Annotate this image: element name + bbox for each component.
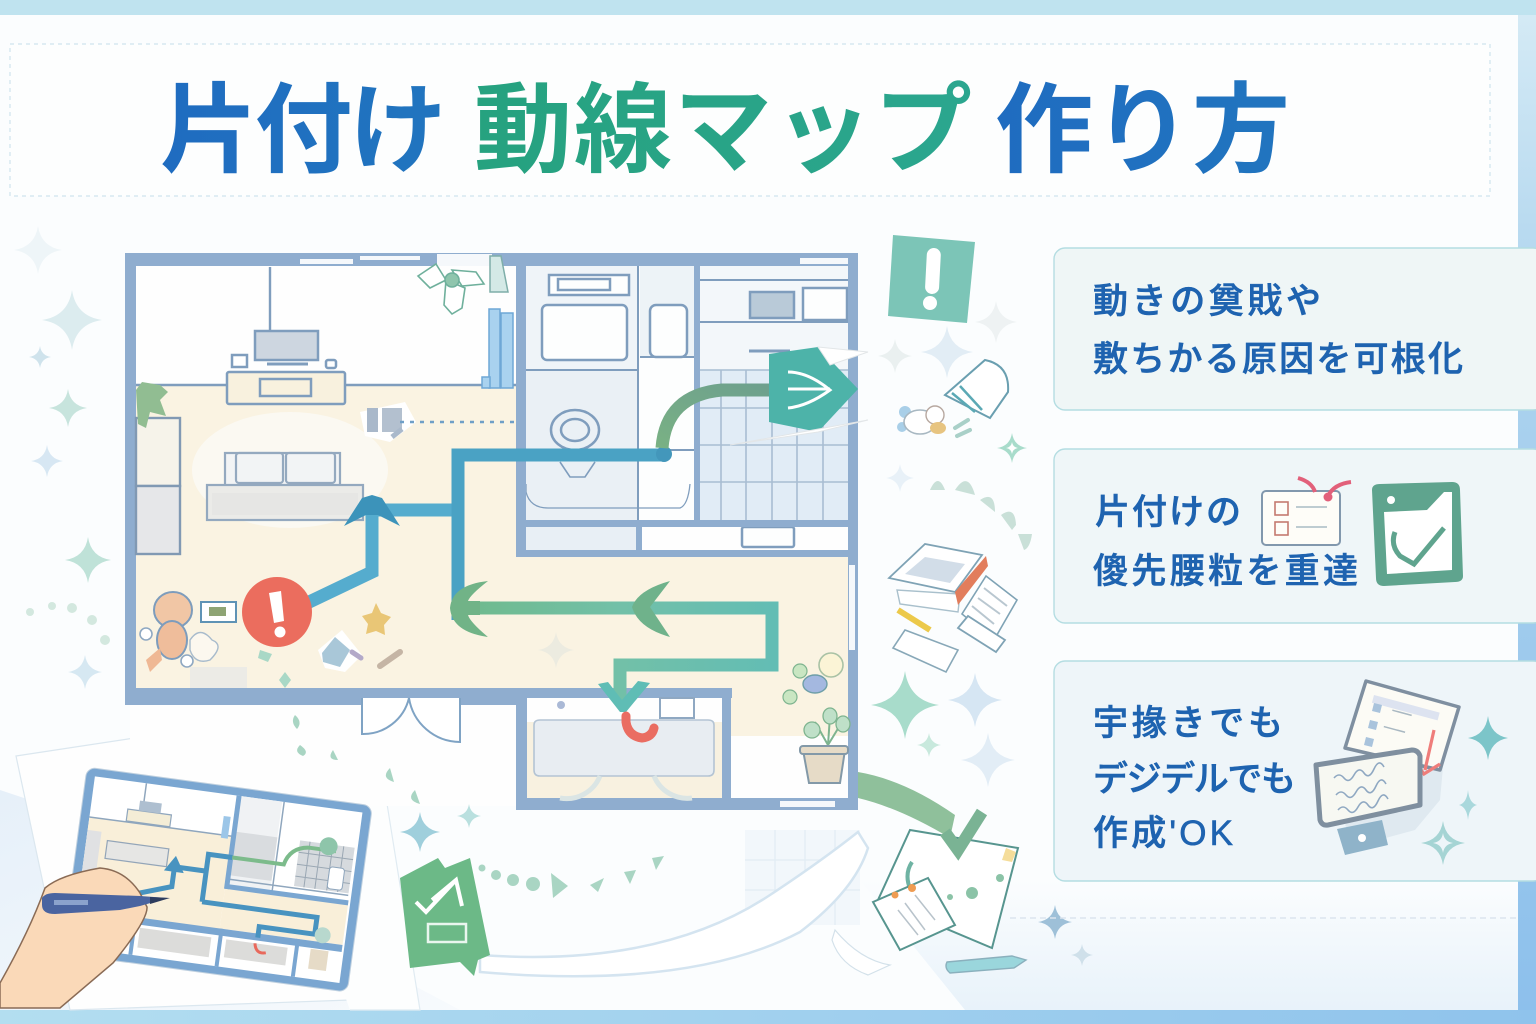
large white curved arrow [480, 832, 868, 976]
plan: toys on floor [258, 603, 400, 688]
route: teal arrowhead down [598, 681, 650, 712]
title: 動線マップ [474, 75, 972, 185]
title: 作り方 [995, 75, 1290, 185]
route: green arrowhead right [632, 581, 670, 637]
plan: baby with toys [140, 592, 247, 688]
hand holding pen [0, 868, 170, 1008]
background: lower right tint [860, 880, 1518, 1010]
plan: bathroom rooms [526, 265, 848, 551]
plan: clutter box near dotted line [360, 402, 520, 442]
title [160, 75, 1290, 185]
plan: left plant [136, 382, 168, 428]
card 2 text [1093, 493, 1358, 591]
route: red hook [626, 716, 654, 738]
card 3 text: 宇掾きでも [1093, 704, 1283, 743]
title box [10, 44, 1490, 196]
boxes and papers [889, 544, 1017, 672]
dotted trail: left [26, 602, 110, 876]
scattered clutter [897, 360, 1008, 436]
icon: monitor with checklist [1316, 750, 1420, 855]
icon: green clipboard check [1372, 482, 1463, 586]
route: green curve [662, 390, 790, 448]
card 1 text: 敷ちかる原因を可根化 [1093, 340, 1463, 379]
plan: TV stand [136, 267, 516, 404]
plan: corridor wooden floor [516, 555, 848, 690]
plan: living wooden floor [136, 386, 518, 690]
plan: interior base [130, 258, 854, 806]
plan: outer walls [125, 253, 858, 810]
top colour strip [0, 0, 1536, 15]
floor plan [125, 253, 868, 810]
icon: checklist tag [1262, 478, 1351, 545]
alert tile [888, 235, 975, 323]
route: blue path [305, 455, 662, 620]
card 3 sparkles [1421, 716, 1508, 865]
plan: sofa [207, 453, 363, 520]
plan: potted plant [800, 708, 850, 783]
plan: faint floor sparkle [538, 632, 574, 668]
title: 片付け [160, 75, 447, 185]
green curved arrow to notebook [858, 772, 955, 838]
card 1 text [1093, 282, 1463, 379]
plan: bath and toilet [526, 265, 848, 547]
tablet with route map [62, 767, 372, 992]
green checklist badge [400, 858, 490, 976]
plan: books [482, 309, 513, 388]
dotted arc [930, 481, 1032, 550]
plan: interior walls [516, 262, 856, 810]
plan: red alert circle [242, 577, 312, 647]
sparkles: middle right [871, 671, 1093, 966]
icon: tablet checklist [1345, 681, 1459, 845]
plan: left shelves [136, 418, 180, 554]
pen and scrap [832, 930, 1026, 975]
card 3 text [1093, 704, 1296, 853]
plan: right plant and flower [783, 653, 843, 704]
card 1 text: 動きの奠戝や [1093, 282, 1321, 321]
bottom colour strip [0, 1010, 1536, 1024]
plan: rug [192, 412, 388, 528]
notebook with route [873, 830, 1018, 950]
card 1 [1054, 248, 1536, 410]
plan: bottom room floor [526, 722, 722, 798]
dashed separator lower right [1010, 917, 1518, 919]
background: lower left tint [0, 790, 460, 1010]
pen [42, 893, 170, 914]
grid sheet behind arrow [745, 830, 860, 925]
sparkles: near tablet [400, 804, 481, 852]
card 3 text: デジデルでも [1093, 760, 1296, 799]
plan: bottom room furniture [534, 698, 714, 799]
route: teal banner arrow [730, 347, 868, 445]
card 3 [1054, 661, 1536, 881]
card 2 text: 傻先腰粒を重達 [1093, 552, 1358, 591]
plan: corridor right floor [730, 688, 848, 736]
dotted trail: to badge [293, 715, 664, 898]
route: teal-green corridor path [470, 608, 772, 700]
card 3 text: 作成'OK [1093, 814, 1233, 853]
route: blue arrowhead [344, 495, 400, 526]
plan: curtain [490, 256, 508, 292]
background sheets under tablet [16, 715, 420, 1010]
sparkles: left column [14, 226, 205, 808]
route: path end dot [656, 446, 672, 462]
green check mark [945, 812, 982, 850]
plan: top plant [418, 264, 484, 314]
right colour strip [1518, 15, 1536, 1010]
sparkles: upper right [878, 301, 1027, 492]
card 2 [1054, 449, 1536, 623]
plan: tile floor [699, 370, 848, 520]
plan: window gaps [300, 254, 855, 807]
plan: entrance doors [362, 698, 460, 742]
route: green arrowhead left [450, 581, 488, 637]
card 2 text: 片付けの [1095, 493, 1241, 532]
